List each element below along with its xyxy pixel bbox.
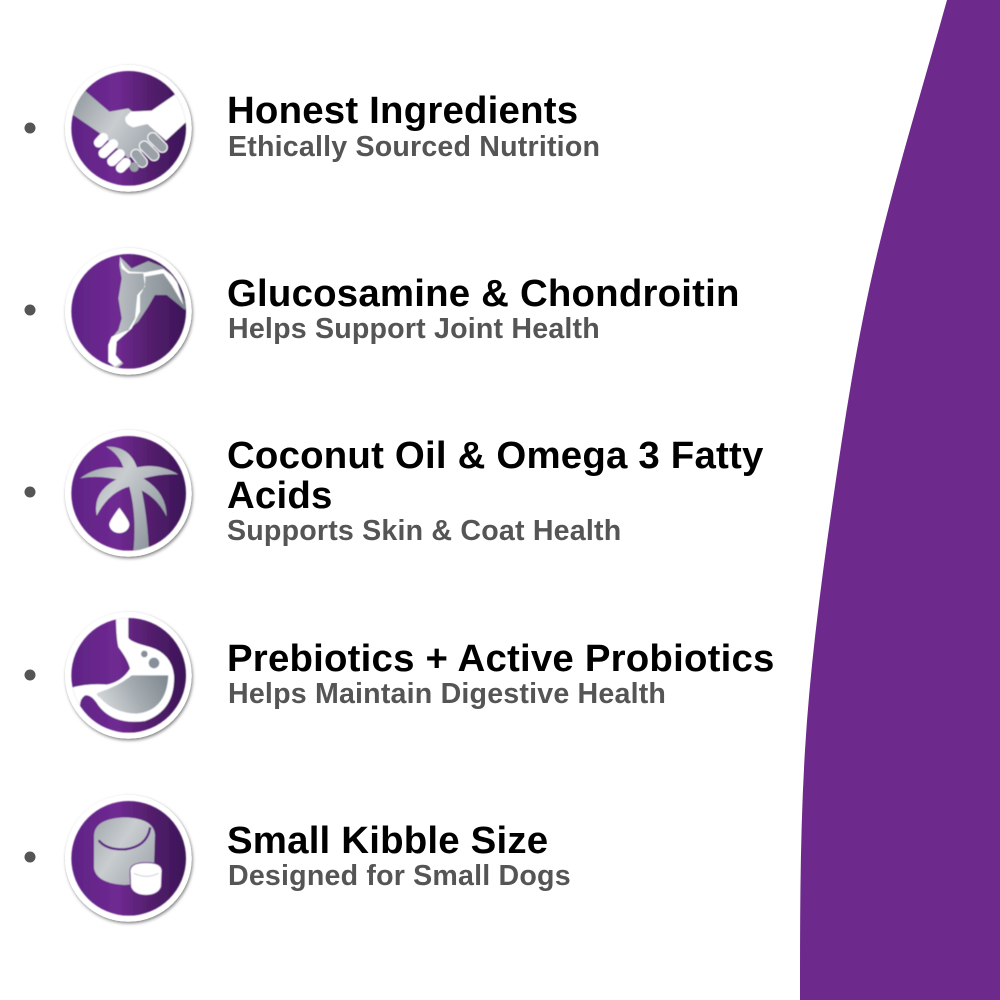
bullet [24, 122, 36, 134]
purple curved panel [800, 0, 1000, 1000]
heading: Coconut Oil & Omega 3 Fatty [227, 434, 764, 477]
bullet [24, 304, 36, 316]
subheading: Helps Maintain Digestive Health [228, 678, 666, 710]
heading: Glucosamine & Chondroitin [227, 272, 740, 315]
dots [141, 651, 148, 657]
bullet [24, 670, 36, 680]
bullet [24, 486, 36, 498]
subheading: Ethically Sourced Nutrition [228, 131, 600, 163]
bullet [24, 852, 36, 862]
row: coconut oil [24, 430, 764, 557]
subheading: Helps Support Joint Health [228, 313, 600, 345]
heading: Acids [227, 474, 333, 517]
subheading: Supports Skin & Coat Health [227, 515, 621, 547]
row: honest ingredients [24, 65, 600, 192]
icon: handshake [65, 65, 192, 192]
heading: Honest Ingredients [227, 89, 578, 132]
row: probiotics [24, 612, 775, 739]
icon: palm tree and drop [65, 430, 192, 557]
icon: kibble pieces [65, 795, 192, 922]
row: glucosamine [24, 248, 740, 375]
icon: stomach [65, 612, 192, 739]
subheading: Designed for Small Dogs [228, 860, 571, 892]
icon: dog leg joint [65, 248, 192, 375]
heading: Small Kibble Size [227, 819, 548, 862]
heading: Prebiotics + Active Probiotics [227, 637, 775, 680]
row: kibble [24, 795, 571, 922]
